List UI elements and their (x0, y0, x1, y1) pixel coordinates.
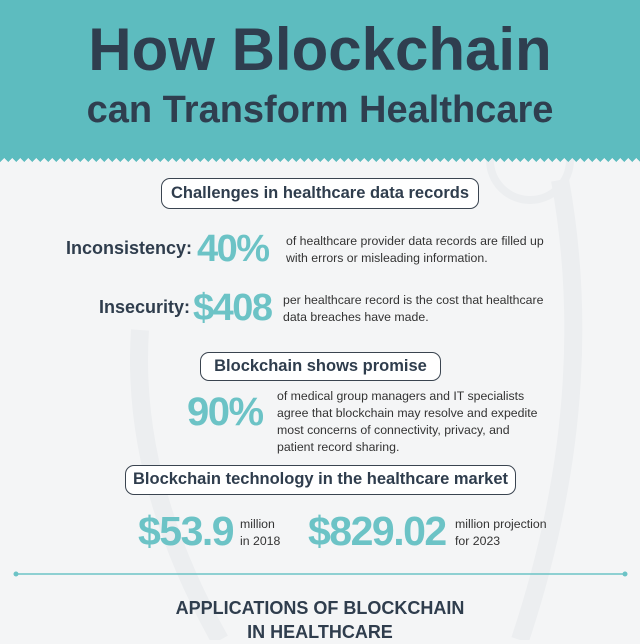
stat: inconsistency (66, 228, 544, 270)
stat: inconsistency: of healthcare provider data records are filled up (286, 234, 544, 248)
subtitle: can Transform Healthcare (87, 89, 553, 131)
stat: market: in 2018 (240, 534, 280, 548)
stat: market: $829.02 (308, 508, 446, 554)
zigzag (0, 154, 640, 162)
stat: 90% (187, 389, 537, 454)
heading: challenges (161, 178, 479, 209)
stat: inconsistency: with errors or misleading information. (286, 250, 488, 264)
stat: 90%: agree that blockchain may resolve and expedite (277, 406, 537, 420)
heading: applications: IN HEALTHCARE (247, 622, 393, 642)
heading: challenges: Challenges in healthcare data records (171, 184, 469, 202)
stat: insecurity: data breaches have made. (283, 310, 429, 324)
stat: 90%: of medical group managers and IT specialists (277, 389, 524, 403)
divider (14, 572, 628, 576)
heading: applications: APPLICATIONS OF BLOCKCHAIN (176, 598, 464, 618)
stat: insecurity: $408 (193, 287, 272, 329)
stat: market: million projection (455, 517, 547, 531)
stat: 90%: patient record sharing. (277, 440, 399, 454)
header (0, 0, 640, 155)
stat: inconsistency: 40% (197, 228, 269, 270)
stat: 90%: 90% (187, 390, 263, 434)
stat: 90%: most concerns of connectivity, privacy, and (277, 423, 510, 437)
stat: insecurity: per healthcare record is the cost that healthcare (283, 293, 543, 307)
heading: market (125, 465, 516, 495)
stat: insecurity: Insecurity: (99, 297, 190, 317)
stat: inconsistency: Inconsistency: (66, 238, 192, 258)
heading: promise: Blockchain shows promise (214, 357, 427, 375)
stat: market: for 2023 (455, 534, 500, 548)
title: How Blockchain (88, 16, 552, 83)
stat: insecurity (99, 287, 543, 329)
stat: market: $53.9 (138, 508, 233, 554)
stat: market (138, 508, 547, 554)
heading: applications (176, 598, 464, 642)
heading: promise (200, 352, 441, 381)
heading: market: Blockchain technology in the healthcare market (133, 470, 508, 488)
stat: market: million (240, 517, 275, 531)
